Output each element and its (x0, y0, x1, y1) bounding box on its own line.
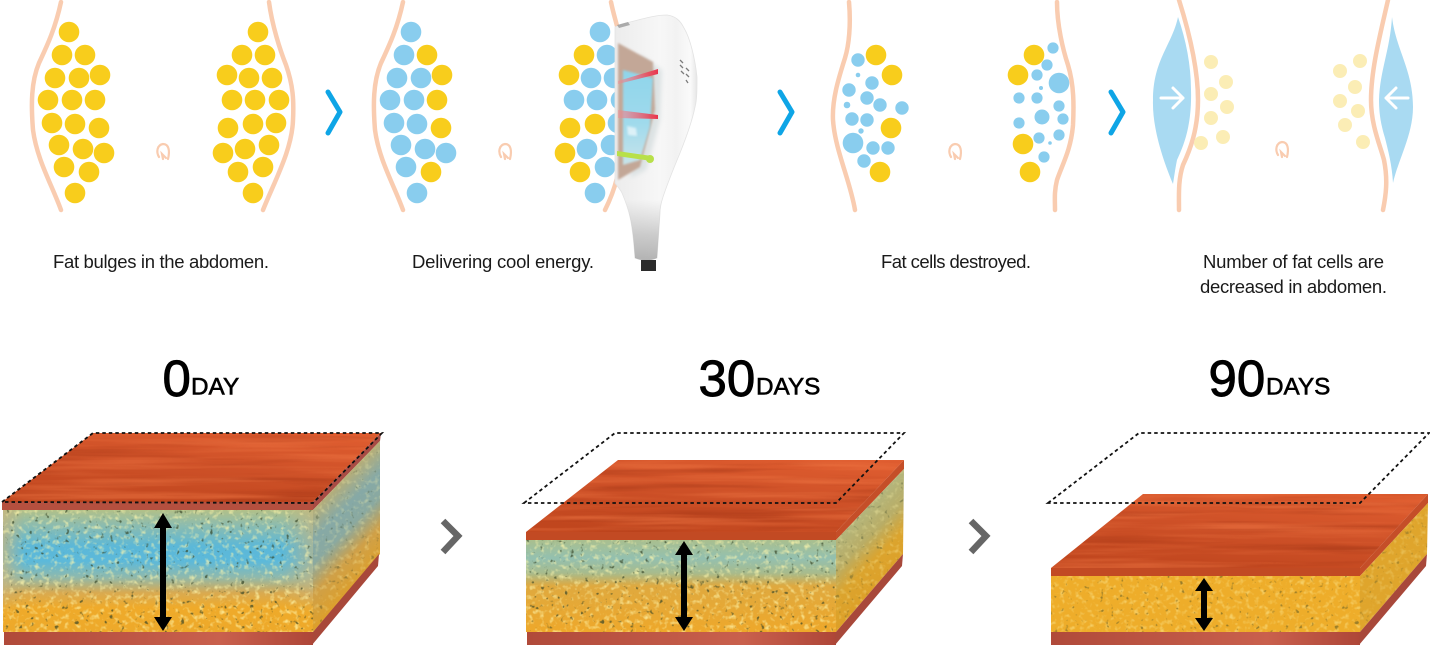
arrow: step 3 to 4 (1111, 92, 1123, 133)
top muscle face (2, 433, 381, 502)
base side strip (312, 554, 379, 645)
arrow: inward right (1386, 88, 1408, 108)
heading: 30 days: DAYS (756, 374, 820, 400)
front skin band (526, 532, 836, 540)
heading: 0 day: DAY (191, 374, 239, 400)
thickness arrow (675, 541, 693, 631)
panel: fat cells decreased (1153, 0, 1413, 297)
side skin strip (1360, 494, 1428, 576)
front skin band (1051, 568, 1360, 576)
body outline right (1055, 2, 1073, 210)
fat layer front (1051, 576, 1360, 632)
cooling pad left (1153, 17, 1191, 184)
original height outline (2, 433, 382, 503)
side skin strip (836, 460, 904, 540)
arrow: inward left (1161, 88, 1183, 108)
base side strip (1359, 554, 1427, 645)
base band (4, 632, 313, 645)
body outline left (374, 2, 403, 210)
top muscle face (1051, 494, 1428, 568)
tissue block: day 0 (2, 433, 382, 645)
icon: navel (157, 144, 169, 159)
thickness arrow (1195, 578, 1213, 631)
body outline left (1179, 0, 1198, 210)
panel: fat cells destroyed (833, 2, 1073, 272)
panel: delivering cool energy (374, 2, 697, 272)
remaining cells right (1333, 54, 1370, 149)
body outline right (263, 2, 293, 210)
cooled cells left (380, 22, 456, 203)
heading: 90 days: DAYS (1266, 374, 1330, 400)
heading: 30 days: 30 (698, 350, 755, 407)
base band (527, 632, 836, 645)
fat layer front (526, 540, 836, 632)
caption: Delivering cool energy. (412, 251, 594, 272)
fat layer side (836, 469, 904, 632)
caption: Fat cells destroyed. (881, 251, 1031, 272)
arrow: step 2 to 3 (780, 92, 792, 133)
top muscle face (526, 460, 904, 532)
fat layer side (1360, 503, 1428, 632)
cooled cells right (555, 22, 631, 203)
front skin band (2, 502, 313, 510)
icon: navel (499, 144, 511, 159)
device: handpiece (615, 15, 697, 271)
base side strip (835, 554, 903, 645)
thickness arrow (154, 513, 172, 631)
arrow: day 0 to 30 (443, 521, 458, 552)
side skin strip (313, 433, 381, 510)
body outline left (32, 2, 61, 210)
fat layer front (3, 510, 313, 632)
body outline right (605, 2, 617, 210)
remaining cells left (1194, 55, 1234, 150)
arrow: day 30 to 90 (971, 521, 986, 552)
heading: 0 day: 0 (162, 350, 191, 407)
original height outline (1048, 433, 1429, 503)
heading: 90 days: 90 (1208, 350, 1265, 407)
cooling pad right (1379, 17, 1413, 183)
body outline right (1371, 0, 1388, 210)
destroyed cells right (1008, 42, 1069, 182)
original height outline (524, 433, 904, 503)
caption: Fat bulges in the abdomen. (53, 251, 269, 272)
caption: Number of fat cells are (1203, 251, 1384, 272)
destroyed cells left (842, 45, 909, 182)
icon: navel (949, 144, 961, 159)
arrow: step 1 to 2 (328, 92, 340, 133)
icon: navel (1276, 142, 1288, 157)
caption: decreased in abdomen. (1200, 276, 1387, 297)
fat layer side (313, 441, 380, 632)
fat cells left (38, 22, 114, 203)
panel: fat bulges (32, 2, 293, 272)
tissue block: day 30 (524, 433, 904, 645)
tissue block: day 90 (1048, 433, 1429, 645)
body outline left (833, 2, 855, 210)
base band (1051, 632, 1360, 645)
fat cells right (213, 22, 289, 203)
